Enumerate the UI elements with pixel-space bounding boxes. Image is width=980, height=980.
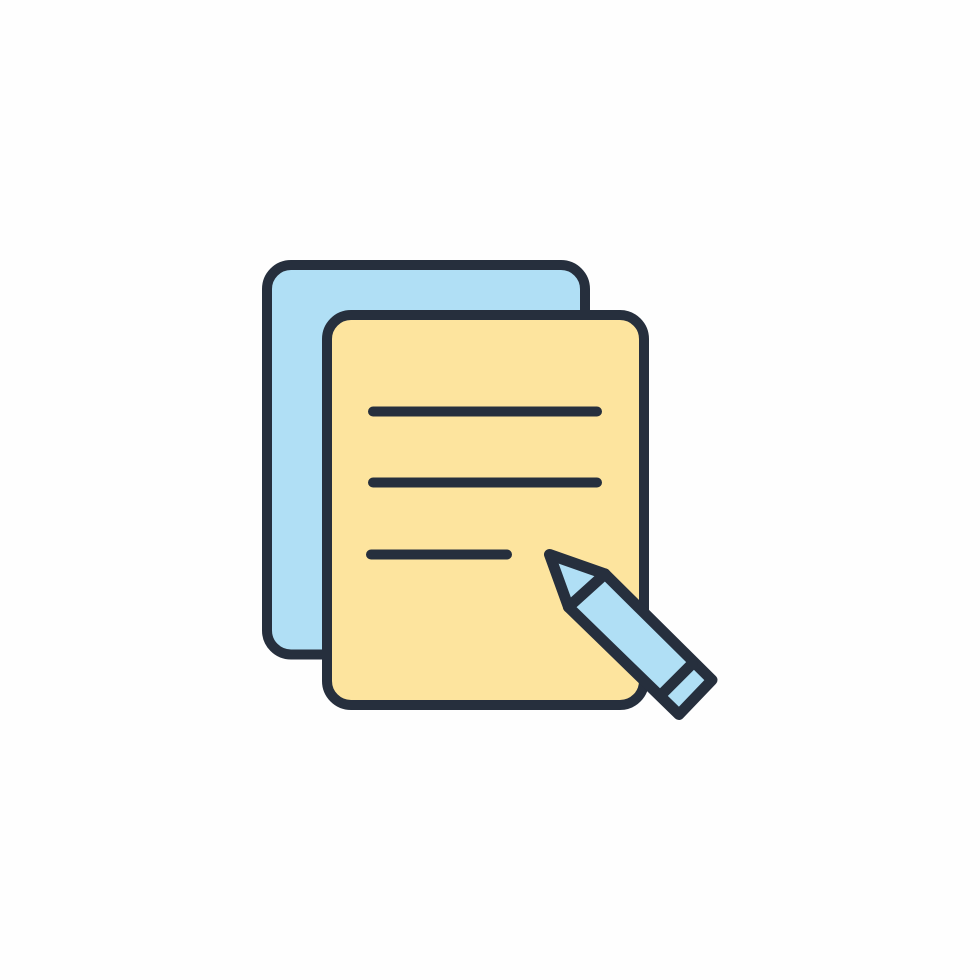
icon: back blue sheet [267, 265, 585, 654]
text lines on the sheet [371, 412, 597, 554]
icon: front yellow sheet [327, 315, 644, 705]
icon: pencil [550, 554, 712, 714]
